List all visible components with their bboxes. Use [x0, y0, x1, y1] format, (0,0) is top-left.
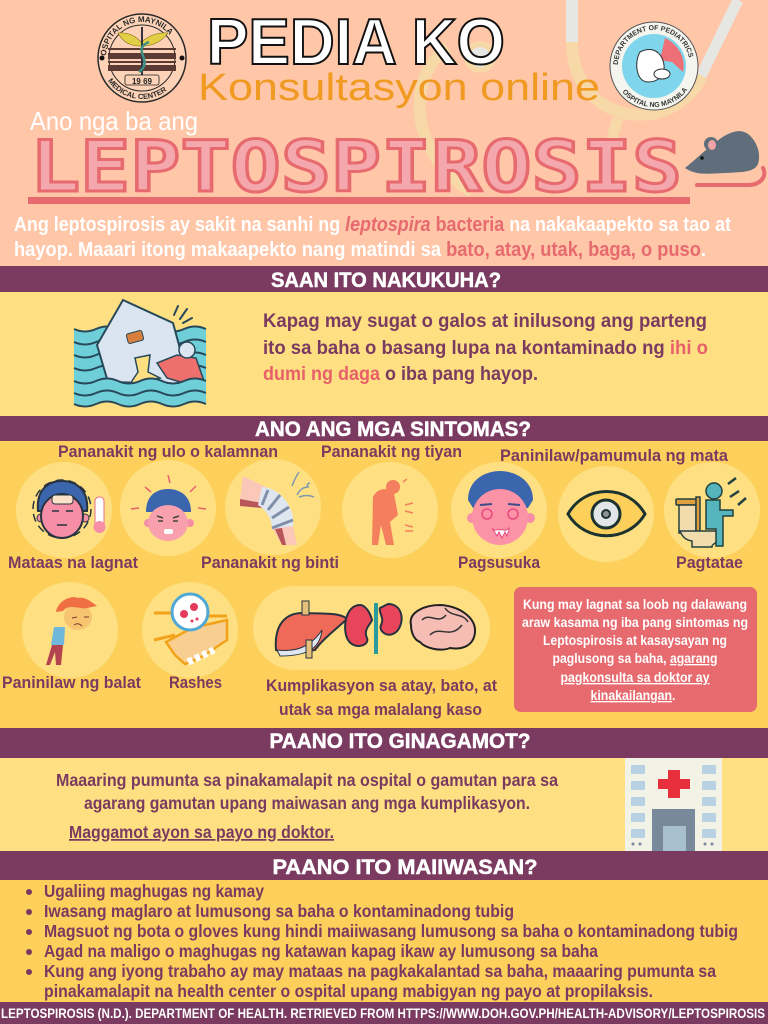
icon: eye [568, 492, 645, 536]
icon: fever face [33, 480, 106, 538]
icon: kidneys [345, 603, 402, 654]
text: treatment [56, 770, 558, 842]
panel: paano ito ginagamot [0, 728, 768, 851]
icon: rat [685, 131, 764, 185]
intro paragraph: hayop. Maaari itong makaapekto nang matindi sa bato, atay, utak, baga, o puso. [14, 239, 706, 261]
callout: seek a doctor: kinakailangan. [590, 688, 676, 703]
symptom labels [2, 442, 743, 719]
logo: Department of Pediatrics: OSPITAL NG MAYNILA [623, 88, 688, 107]
icon: rash on hands [154, 594, 227, 664]
subtitle: Konsultasyon online: Konsultasyon online [198, 67, 600, 109]
callout: seek a doctor: paglusong sa baha, agarang [552, 651, 718, 666]
heading: ano ang mga sintomas: ANO ANG MGA SINTOMAS? [255, 418, 531, 441]
symptom labels: Kumplikasyon sa atay, bato, at [266, 676, 497, 695]
logo: Ospital ng Maynila: 19 69 [132, 77, 153, 86]
icon: stomach pain figure [372, 479, 413, 545]
logo: Department of Pediatrics [610, 22, 698, 110]
panel: paano ito maiiwasan [0, 851, 768, 1002]
icon: jaundiced child [46, 597, 97, 665]
icon: flood house [74, 300, 206, 406]
callout: seek a doctor [514, 587, 757, 712]
heading: paano ito maiiwasan: PAANO ITO MAIIWASAN? [272, 856, 538, 879]
symptom circles backdrop [16, 459, 760, 678]
text: how transmitted: ito sa baha o basang lupa na kontaminado ng ihi o [263, 337, 708, 359]
heading: paano ito ginagamot: PAANO ITO GINAGAMOT? [270, 730, 530, 753]
text: how transmitted [263, 310, 708, 385]
icon: bandaged leg [240, 472, 314, 545]
symptom labels: Rashes [169, 673, 222, 692]
icon: headache face [131, 475, 206, 541]
symptom labels: Paninilaw/pamumula ng mata [500, 446, 729, 465]
list: prevention: Ugaliing maghugas ng kamay [44, 881, 264, 901]
icon: vomiting face [467, 471, 535, 545]
title: Pedia Ko: PEDIA KO [207, 5, 505, 78]
text: treatment: agarang gamutan upang maiwasan ang mga kumplikasyon. [84, 793, 530, 813]
text: how transmitted: dumi ng daga o iba pang hayop. [263, 363, 538, 385]
callout: seek a doctor: Kung may lagnat sa loob ng dalawang [523, 597, 747, 612]
stethoscope background [420, 0, 738, 192]
intro paragraph [14, 214, 731, 261]
symptom labels: Pagsusuka [458, 553, 540, 572]
text: treatment: Maggamot ayon sa payo ng doktor. [69, 822, 334, 842]
symptom labels: utak sa mga malalang kaso [279, 700, 482, 719]
title: Leptospirosis: LEPTOSPIROSIS [30, 126, 682, 208]
logo: Ospital ng Maynila: MEDICAL CENTER [108, 78, 167, 99]
symptom labels: Pananakit ng ulo o kalamnan [58, 442, 278, 461]
intro paragraph: Ang leptospirosis ay sakit na sanhi ng leptospira bacteria na nakakaapekto sa tao at [14, 214, 731, 236]
symptom labels: Mataas na lagnat [8, 553, 138, 572]
icon: liver [276, 601, 347, 658]
callout: seek a doctor: pagkonsulta sa doktor ay [560, 670, 710, 685]
text: how transmitted: Kapag may sugat o galos at inilusong ang parteng [263, 310, 707, 332]
list: prevention: pinakamalapit na health center o ospital upang mabigyan ng payo at propilaksis. [44, 981, 653, 1001]
symptom labels: Paninilaw ng balat [2, 673, 141, 692]
logo: Ospital ng Maynila [97, 13, 187, 103]
symptom labels: Pagtatae [676, 553, 743, 572]
symptom labels: Pananakit ng binti [201, 553, 339, 572]
logo: Department of Pediatrics: DEPARTMENT OF PEDIATRICS [613, 25, 694, 64]
icon: hospital [625, 758, 722, 851]
list: prevention [26, 881, 738, 1001]
heading: saan ito nakukuha: SAAN ITO NAKUKUHA? [271, 269, 501, 292]
callout: seek a doctor: araw kasama ng iba pang sintomas ng [522, 615, 748, 630]
list: prevention: Kung ang iyong trabaho ay may mataas na pagkakalantad sa baha, maaaring pumunta sa [44, 961, 716, 981]
text: treatment: Maaaring pumunta sa pinakamalapit na ospital o gamutan para sa [56, 770, 558, 790]
callout: seek a doctor: Leptospirosis at kasaysayan ng [543, 633, 727, 648]
symptom labels: Pananakit ng tiyan [321, 442, 462, 461]
list: prevention: Agad na maligo o maghugas ng katawan kapag ikaw ay lumusong sa baha [44, 941, 598, 961]
intro line: Ano nga ba ang: Ano nga ba ang [30, 106, 198, 136]
logo: Ospital ng Maynila: OSPITAL NG MAYNILA [100, 16, 172, 56]
panel: ano ang mga sintomas [0, 416, 768, 728]
icon: brain [411, 605, 475, 650]
title underline [28, 197, 690, 204]
list: prevention: Iwasang maglaro at lumusong sa baha o kontaminadong tubig [44, 901, 514, 921]
panel: saan ito nakukuha [0, 266, 768, 416]
icon: toilet [676, 478, 746, 547]
